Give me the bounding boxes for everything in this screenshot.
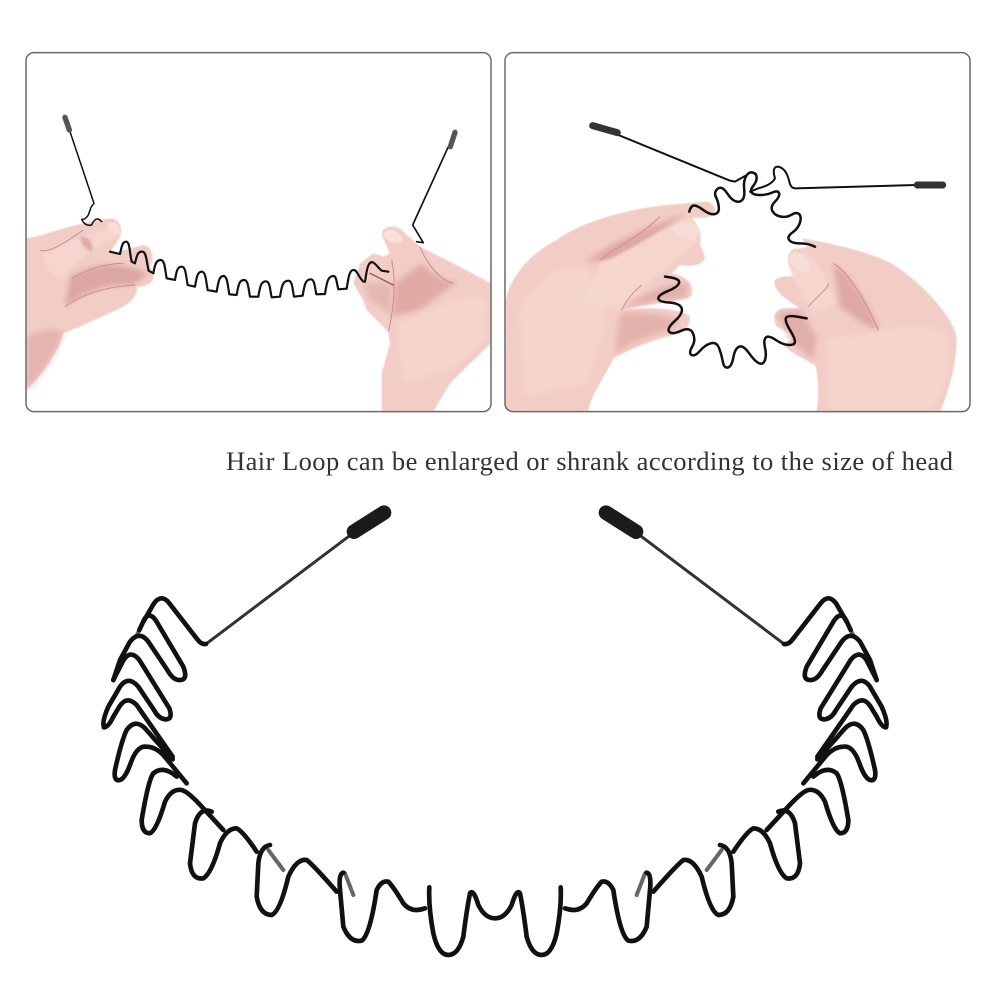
panel: band curled into a small loop between two hands bbox=[505, 53, 970, 412]
right end cap bbox=[606, 513, 636, 532]
product: wave hair band bbox=[103, 513, 887, 955]
panel: band stretched open between two hands bbox=[26, 53, 491, 412]
thumb nail bbox=[789, 254, 798, 263]
right hand bbox=[774, 238, 957, 412]
stretched wire band bbox=[65, 117, 455, 297]
left hand bbox=[505, 202, 715, 412]
left half of hair band bbox=[103, 513, 495, 955]
caption: Hair Loop can be enlarged or shrank according to the size of head bbox=[226, 446, 953, 476]
right half of hair band bbox=[495, 513, 887, 955]
left hand bbox=[26, 218, 153, 390]
thumb nail bbox=[107, 222, 120, 235]
left end cap bbox=[354, 513, 384, 532]
thumb nail bbox=[676, 222, 700, 237]
right hand bbox=[353, 226, 491, 412]
curled wire band bbox=[593, 126, 943, 368]
thumb nail bbox=[383, 230, 403, 243]
